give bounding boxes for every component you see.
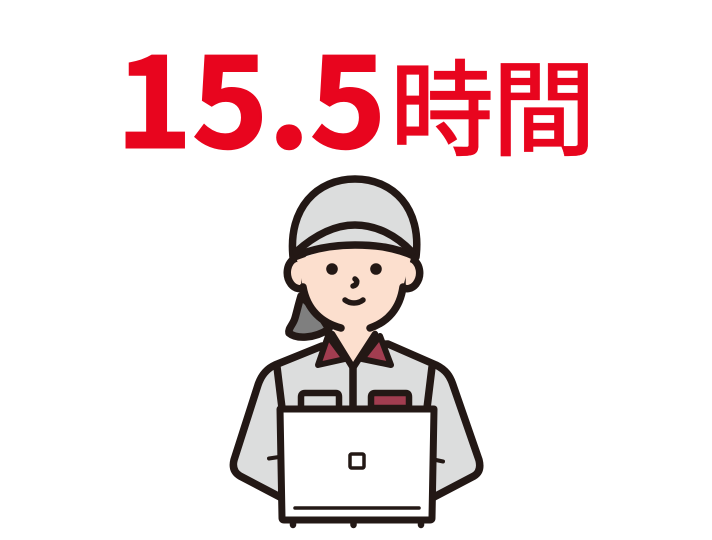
cap dome	[292, 179, 417, 257]
nose	[353, 279, 357, 286]
number: 15.5: 15.5	[116, 4, 386, 184]
cap brim	[296, 225, 412, 252]
ears	[287, 258, 420, 289]
collar left	[318, 336, 345, 365]
right pocket	[371, 393, 409, 408]
ponytail	[289, 296, 329, 337]
neck	[331, 325, 378, 369]
sleeve seams	[277, 367, 432, 408]
laptop logo	[350, 454, 364, 468]
illustration: worker with laptop	[233, 179, 480, 525]
torso and sleeves	[233, 344, 480, 497]
placket	[349, 368, 357, 408]
laptop feet	[293, 520, 421, 525]
collar right	[362, 336, 391, 365]
right eye	[370, 263, 382, 275]
mouth	[345, 300, 363, 303]
face	[297, 240, 411, 328]
left eye	[326, 263, 338, 275]
forearm creases	[269, 457, 443, 462]
laptop	[280, 409, 434, 520]
collar V neck	[332, 334, 375, 368]
title: 15.5 hours	[116, 4, 596, 184]
laptop base line	[295, 506, 419, 510]
unit: hours: 時間	[390, 26, 596, 177]
left pocket	[301, 393, 339, 408]
